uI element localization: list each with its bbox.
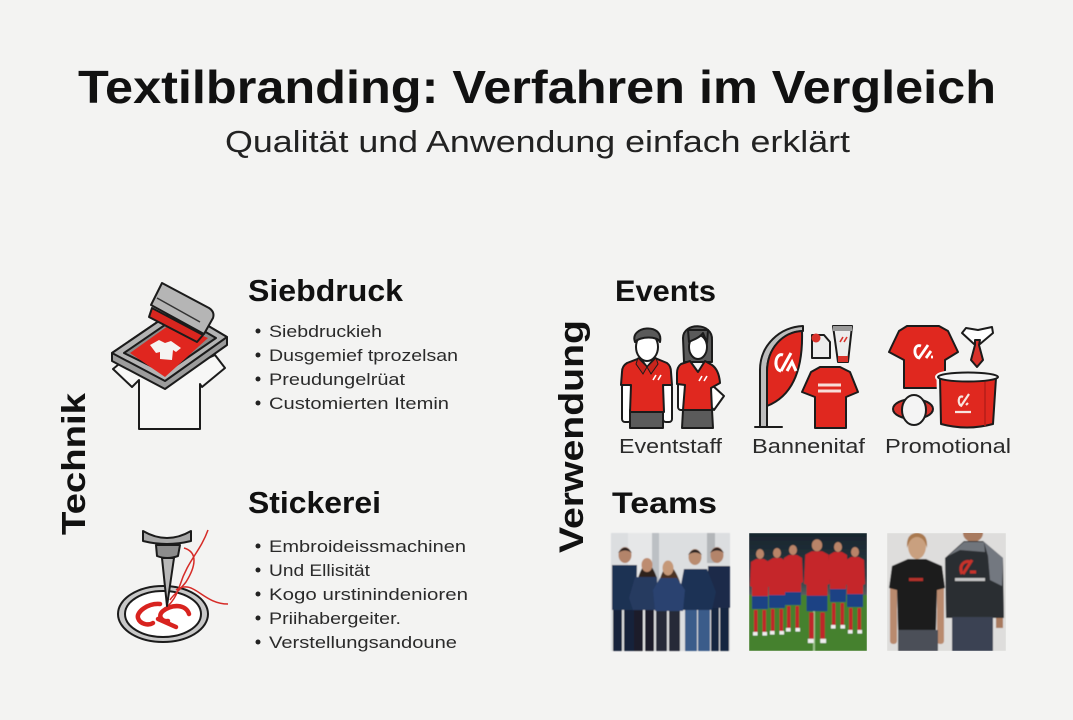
bullet list: Stickerei bbox=[256, 537, 468, 652]
heading: Events: Events bbox=[615, 275, 716, 308]
panel: Events bbox=[615, 275, 1011, 458]
label: Promotional: Promotional bbox=[885, 436, 1011, 458]
section label: Technik: Technik bbox=[55, 392, 92, 535]
icon: female event staff bbox=[677, 326, 724, 428]
label: Eventstaff: Eventstaff bbox=[619, 436, 723, 458]
icon: promotional bucket bbox=[938, 372, 998, 428]
bullet list: Siebdruck: Dusgemief tprozelsan bbox=[269, 346, 458, 365]
heading: Teams: Teams bbox=[612, 487, 717, 520]
photo: black polo and work jacket bbox=[887, 524, 1006, 651]
section label: Verwendung: Verwendung bbox=[553, 320, 591, 553]
icon: collar and tie bbox=[962, 327, 993, 367]
subtitle: Qualität und Anwendung einfach erklärt bbox=[225, 124, 850, 159]
panel: Stickerei bbox=[118, 485, 468, 652]
panel: Teams bbox=[611, 487, 1006, 651]
icon: male event staff bbox=[621, 328, 672, 428]
icon: embroidery needle, hoop and thread bbox=[118, 530, 228, 642]
bullet list: Stickerei: Embroideissmachinen bbox=[269, 537, 466, 556]
icon: tube bbox=[833, 326, 852, 362]
label: Bannenitaf: Bannenitaf bbox=[752, 436, 866, 458]
icon: cap bbox=[893, 395, 933, 425]
heading: Siebdruck: Siebdruck bbox=[248, 273, 404, 308]
bullet list: Siebdruck bbox=[256, 322, 458, 413]
panel: Siebdruck bbox=[112, 273, 458, 429]
title: Textilbranding: Verfahren im Vergleich bbox=[78, 61, 996, 113]
bullet list: Siebdruck: Preudungelrüat bbox=[269, 370, 405, 389]
heading: Stickerei: Stickerei bbox=[248, 485, 381, 520]
bullet list: Stickerei: Und Ellisität bbox=[269, 561, 370, 580]
icon: beach flag bbox=[755, 326, 803, 427]
icon: promotional t-shirt bbox=[889, 326, 958, 388]
icon: flyer document bbox=[812, 334, 830, 358]
photo: corporate team in navy polos bbox=[611, 533, 730, 651]
photo: football team on pitch bbox=[749, 533, 867, 651]
bullet list: Stickerei: Kogo urstinindenioren bbox=[269, 585, 468, 604]
bullet list: Stickerei: Verstellungsandoune bbox=[269, 633, 457, 652]
icon: screen printing frame with squeegee and t-shirt bbox=[112, 283, 227, 429]
bullet list: Siebdruck: Customierten Itemin bbox=[269, 394, 449, 413]
bullet list: Siebdruck: Siebdruckieh bbox=[269, 322, 382, 341]
bullet list: Stickerei: Priihabergeiter. bbox=[269, 609, 401, 628]
icon: branded t-shirt bbox=[802, 367, 858, 428]
